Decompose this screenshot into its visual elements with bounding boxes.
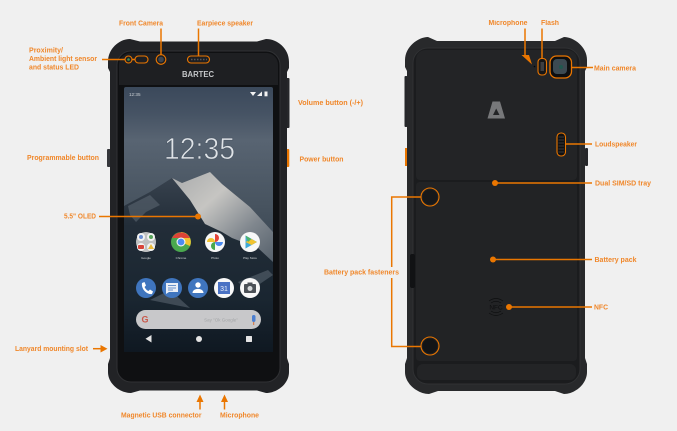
microphone hole xyxy=(534,66,535,67)
app icon: Calendar: 31 xyxy=(220,286,228,293)
label: OLED display: 5.5" OLED xyxy=(64,214,96,220)
status LED xyxy=(127,58,130,61)
label: Earpiece speaker xyxy=(188,20,253,63)
search bar: Say "Ok Google" xyxy=(204,318,238,322)
label: rear Microphone: Microphone xyxy=(488,20,528,27)
back rim xyxy=(413,48,580,384)
label: Power button: Power button xyxy=(300,156,344,164)
app icon: Photos: Photo xyxy=(211,256,219,260)
label: Main camera xyxy=(550,56,636,78)
back phone body xyxy=(405,37,587,394)
app icon: Phone xyxy=(136,278,156,298)
label: Dual SIM/SD tray xyxy=(492,180,651,188)
label: Magnetic USB connector xyxy=(121,394,204,420)
front phone body xyxy=(108,39,289,393)
bottom strip xyxy=(417,364,576,380)
label: Dual SIM/SD tray: Dual SIM/SD tray xyxy=(595,180,651,188)
volume button xyxy=(286,78,290,128)
earpiece grille xyxy=(191,58,207,60)
wallpaper sky xyxy=(124,87,273,352)
label: Magnetic USB connector: Magnetic USB connector xyxy=(121,412,202,420)
brand triangle logo xyxy=(488,102,505,118)
screen xyxy=(124,87,273,352)
label: Main camera: Main camera xyxy=(594,66,636,72)
label: Front Camera: Front Camera xyxy=(119,20,163,28)
app icon: Play Store xyxy=(240,232,260,260)
label: NFC: NFC xyxy=(594,304,608,312)
power button xyxy=(286,149,289,167)
flash module xyxy=(538,59,546,75)
label: Flash xyxy=(538,20,559,75)
label: Battery pack xyxy=(490,256,637,264)
label: bottom Microphone xyxy=(220,394,259,420)
label: Battery pack fasteners: Battery pack fasteners xyxy=(324,270,399,276)
label: Proximity sensor and LED: Ambient light sensor xyxy=(29,56,97,63)
bottom fastener xyxy=(422,338,438,354)
app icon: Messages xyxy=(162,278,182,298)
label: Loudspeaker: Loudspeaker xyxy=(595,142,637,148)
app icon: Calendar xyxy=(214,278,234,298)
app icon: Chrome xyxy=(171,232,191,260)
app icon: Camera xyxy=(240,278,260,298)
top fastener xyxy=(422,190,438,204)
side slot xyxy=(410,254,415,288)
programmable button xyxy=(107,149,110,167)
front camera lens xyxy=(158,57,164,62)
wallpaper snow xyxy=(172,172,273,262)
label: Loudspeaker xyxy=(557,133,637,156)
top bezel texture xyxy=(119,53,278,85)
clock: 12:35 xyxy=(164,131,235,166)
label: Proximity sensor and LED: Proximity/ xyxy=(29,48,63,54)
status icons xyxy=(250,92,268,96)
label: rear Microphone xyxy=(488,20,532,64)
label: Earpiece speaker: Earpiece speaker xyxy=(197,20,253,28)
search bar: G xyxy=(141,314,149,324)
search bar xyxy=(136,310,261,329)
app icon: Contacts xyxy=(188,278,208,298)
label: Battery pack: Battery pack xyxy=(594,257,637,264)
status bar time: 12:35 xyxy=(129,92,141,97)
app icon: Google: Google xyxy=(141,256,151,260)
label: Lanyard mounting slot: Lanyard mounting slot xyxy=(15,346,89,353)
app icon: Photos xyxy=(205,232,225,260)
app icon: Google xyxy=(136,232,156,260)
wallpaper mountain xyxy=(124,172,273,352)
upper cover xyxy=(416,50,577,180)
NFC mark xyxy=(489,298,503,316)
label: OLED display xyxy=(64,214,201,220)
loudspeaker grille xyxy=(557,133,566,156)
label: Proximity sensor and LED xyxy=(29,48,148,72)
main camera module xyxy=(550,56,572,78)
battery panel xyxy=(416,182,577,361)
label: Proximity sensor and LED: and status LED xyxy=(29,64,79,72)
snow patches xyxy=(128,195,273,308)
label: NFC xyxy=(506,304,608,312)
label: Battery pack fasteners xyxy=(324,188,439,355)
label: Volume button: Volume button (-/+) xyxy=(298,100,363,107)
navigation bar xyxy=(146,335,252,342)
back phone xyxy=(404,37,588,394)
label: Front Camera xyxy=(119,20,166,64)
label: Programmable button: Programmable button xyxy=(27,155,99,162)
back volume button xyxy=(404,76,408,127)
app icon: Chrome: Chrome xyxy=(176,256,187,260)
back power button xyxy=(405,148,407,166)
label: bottom Microphone: Microphone xyxy=(220,412,259,420)
NFC mark: NFC xyxy=(489,304,503,312)
back programmable button xyxy=(585,148,588,166)
front phone xyxy=(107,39,290,393)
front bezel xyxy=(117,51,280,382)
label: Flash: Flash xyxy=(541,20,559,27)
brand logo: BARTEC xyxy=(182,70,214,79)
app icon: Play Store: Play Store xyxy=(243,256,257,260)
